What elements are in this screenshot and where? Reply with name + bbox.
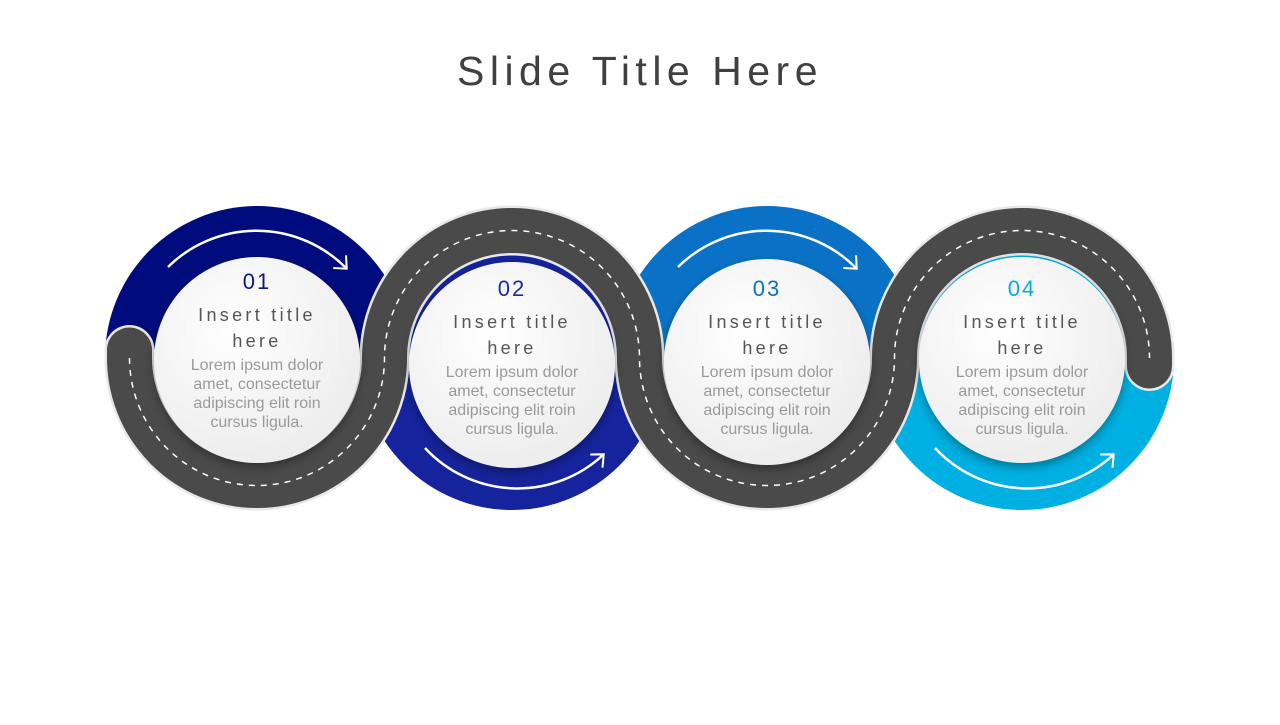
step 1: Lorem ipsum dolor [191,357,324,374]
step 1: Insert title [198,305,316,325]
title: Slide Title Here [457,48,823,94]
step 1: 01 [243,269,271,294]
step 3: adipiscing elit roin [703,402,831,419]
step 3: amet, consectetur [703,383,831,400]
step 4: amet, consectetur [958,383,1086,400]
disc 1 [105,206,409,510]
road [130,231,1150,486]
arrow 4 [935,448,1113,488]
step 3: Insert title [708,312,826,332]
step 3: Lorem ipsum dolor [701,364,834,381]
step 4: Lorem ipsum dolor [956,364,1089,381]
step 3: cursus ligula. [720,421,814,438]
step 4: Insert title [963,312,1081,332]
arrow 2 [425,448,603,488]
step 1: here [232,331,282,351]
step 2: Insert title [453,312,571,332]
step 2: 02 [498,276,526,301]
disc 3 [615,206,919,510]
step 4: cursus ligula. [975,421,1069,438]
step 2: Lorem ipsum dolor [446,364,579,381]
disc 4 [870,206,1174,510]
step 2: adipiscing elit roin [448,402,576,419]
step 4: adipiscing elit roin [958,402,1086,419]
step 2: cursus ligula. [465,421,559,438]
step 1 [154,257,360,463]
step 2 [409,262,615,468]
step 3: 03 [753,276,781,301]
step 3 [664,259,870,465]
step 4 [919,257,1125,463]
step 1: amet, consectetur [193,376,321,393]
arrow 1 [168,231,346,268]
disc 2 [360,206,664,510]
step 1: cursus ligula. [210,414,304,431]
step 2: here [487,338,537,358]
step 3: here [742,338,792,358]
step 4: 04 [1008,276,1036,301]
step 4: here [997,338,1047,358]
step 2: amet, consectetur [448,383,576,400]
arrow 3 [678,231,856,268]
step 1: adipiscing elit roin [193,395,321,412]
